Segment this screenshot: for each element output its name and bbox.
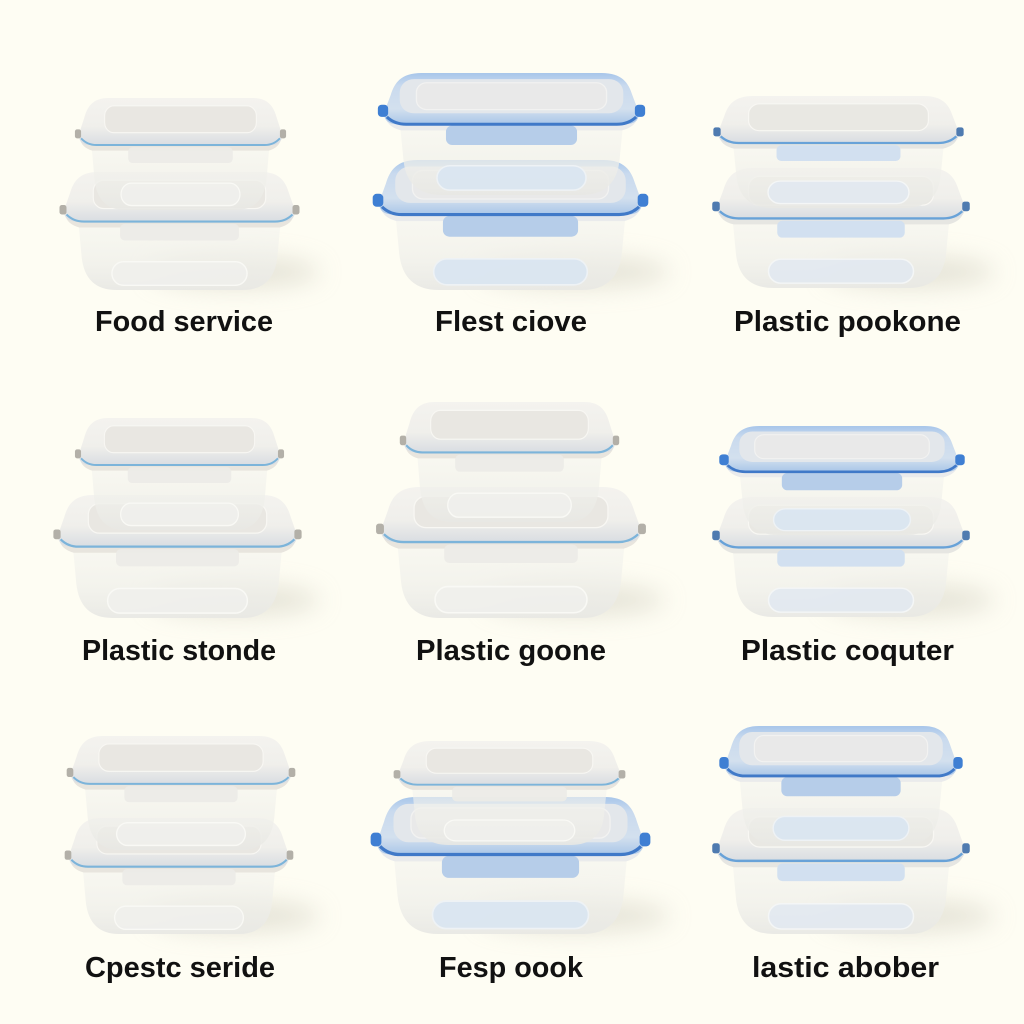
label: lastic abober bbox=[752, 952, 939, 984]
lower container bbox=[712, 808, 970, 934]
label: Fesp oook bbox=[439, 952, 584, 984]
lower container bbox=[371, 797, 650, 934]
panel: Food service bbox=[60, 98, 320, 338]
lower container bbox=[712, 168, 970, 288]
panel: Plastic stonde bbox=[53, 418, 320, 667]
panel: Plastic goone bbox=[376, 402, 665, 667]
upper container bbox=[400, 402, 619, 522]
upper container bbox=[713, 96, 964, 208]
panel: Flest ciove bbox=[373, 73, 670, 338]
label: Plastic coquter bbox=[741, 635, 954, 667]
lower container bbox=[53, 495, 302, 618]
upper container bbox=[67, 736, 295, 850]
upper container bbox=[75, 98, 286, 210]
label: Flest ciove bbox=[435, 306, 587, 338]
panel: Plastic pookone bbox=[712, 96, 995, 338]
panel: Fesp oook bbox=[371, 741, 670, 984]
label: Plastic goone bbox=[416, 635, 606, 667]
lower container bbox=[60, 172, 299, 290]
label: Cpestc seride bbox=[85, 952, 275, 984]
upper container bbox=[394, 741, 625, 845]
label: Plastic stonde bbox=[82, 635, 276, 667]
upper container bbox=[378, 73, 645, 195]
panel: Plastic coquter bbox=[712, 426, 995, 667]
upper container bbox=[719, 726, 963, 845]
panel: lastic abober bbox=[712, 726, 995, 984]
lower container bbox=[65, 818, 293, 934]
lower container bbox=[376, 487, 646, 618]
panel: Cpestc seride bbox=[65, 736, 320, 984]
label: Plastic pookone bbox=[734, 306, 961, 338]
upper container bbox=[75, 418, 284, 530]
lower container bbox=[373, 160, 648, 290]
upper container bbox=[719, 426, 965, 535]
label: Food service bbox=[95, 306, 273, 338]
lower container bbox=[712, 497, 970, 617]
